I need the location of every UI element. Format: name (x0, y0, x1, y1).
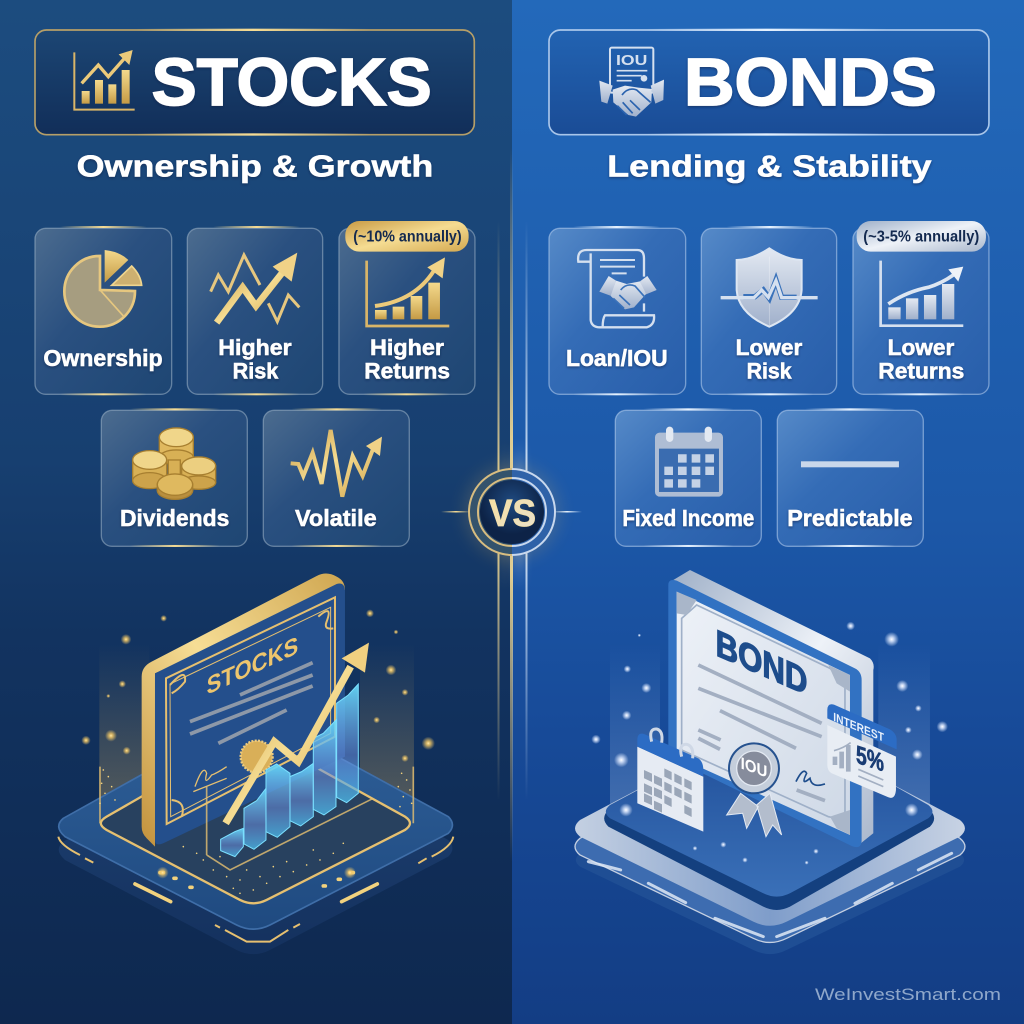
card: Lower Risk: Risk (747, 358, 792, 383)
label: Dividends (120, 505, 229, 531)
card: interest: 5% (856, 739, 884, 777)
seal with ribbon (727, 742, 782, 837)
watermark: WeInvestSmart.com (815, 985, 1001, 1004)
illustration: bond certificate on platform (575, 570, 965, 954)
icon: gentle chart (881, 261, 963, 326)
label: Higher (218, 335, 292, 360)
title: BONDS: BONDS (684, 46, 937, 120)
icon: flat line (801, 461, 899, 467)
label: Lower (888, 335, 955, 360)
card: Predictable (777, 408, 923, 547)
label: Higher (370, 335, 444, 360)
card: Fixed Income (615, 408, 761, 547)
seal with ribbon: IOU (741, 753, 767, 782)
background: bonds side (512, 0, 1024, 1024)
icon: volatile line (291, 430, 382, 497)
panel: stocks feature cards (35, 221, 475, 547)
icon: IOU and handshake (599, 48, 664, 117)
badge: ~10% annually: (~10% annually) (353, 229, 462, 246)
card: Dividends (101, 408, 247, 547)
badge: ~3-5% annually: (~3-5% annually) (863, 229, 979, 246)
icon: calendar (655, 427, 723, 497)
card: interest (827, 704, 897, 798)
card: Higher Risk (187, 226, 323, 395)
panel: bonds feature cards (549, 221, 989, 547)
label: Lower (736, 335, 803, 360)
chart: glass bars (221, 684, 358, 857)
label: Ownership (43, 345, 163, 371)
icon: zigzag arrow (211, 253, 299, 323)
card: Ownership (35, 226, 172, 395)
label: Fixed Income (622, 505, 754, 531)
background: stocks side (0, 0, 512, 1024)
title: STOCKS: STOCKS (152, 46, 432, 120)
platform (58, 717, 453, 954)
panel: bonds header (549, 29, 989, 184)
icon: stock chart (74, 50, 135, 110)
signature (796, 771, 825, 785)
certificate (668, 570, 874, 847)
VS badge: VS (489, 493, 536, 535)
icon: scroll and handshake (578, 250, 657, 327)
badge: ~3-5% annually (857, 221, 986, 252)
icon: shield (721, 248, 818, 327)
card: Higher Returns: Returns (364, 358, 450, 383)
VS badge (464, 464, 560, 560)
panel: stocks header (35, 29, 474, 184)
badge: ~10% annually (345, 221, 469, 252)
illustration: stocks certificate on platform (58, 573, 453, 954)
sparkles (81, 609, 435, 893)
label: Volatile (295, 505, 377, 531)
arrow: growth (226, 643, 369, 823)
icon: rising bars (367, 257, 449, 326)
subtitle: Lending & Stability: Lending & Stability (607, 150, 932, 184)
certificate title: BOND (716, 623, 807, 704)
icon: IOU and handshake: IOU (616, 53, 647, 69)
certificate title: STOCKS (207, 632, 298, 701)
platform (575, 722, 965, 954)
seal (241, 741, 273, 773)
card: Higher Risk: Risk (233, 358, 279, 383)
certificate (142, 573, 345, 847)
subtitle: Ownership & Growth: Ownership & Growth (77, 150, 433, 184)
icon: calendar (637, 729, 703, 832)
label: Predictable (787, 505, 913, 531)
card: interest: INTEREST (833, 710, 884, 745)
icon: pie chart (64, 250, 142, 327)
signature (193, 767, 227, 792)
card: Loan/IOU (549, 226, 686, 395)
central VS divider (441, 80, 582, 930)
label: Loan/IOU (566, 345, 668, 371)
card: Higher Returns (339, 221, 475, 395)
card: Lower Returns: Returns (878, 358, 964, 383)
card: Lower Returns (853, 221, 989, 395)
icon: coin stacks (133, 428, 216, 499)
card: Volatile (263, 408, 409, 547)
card: Lower Risk (701, 226, 837, 395)
sparkles (591, 622, 948, 865)
